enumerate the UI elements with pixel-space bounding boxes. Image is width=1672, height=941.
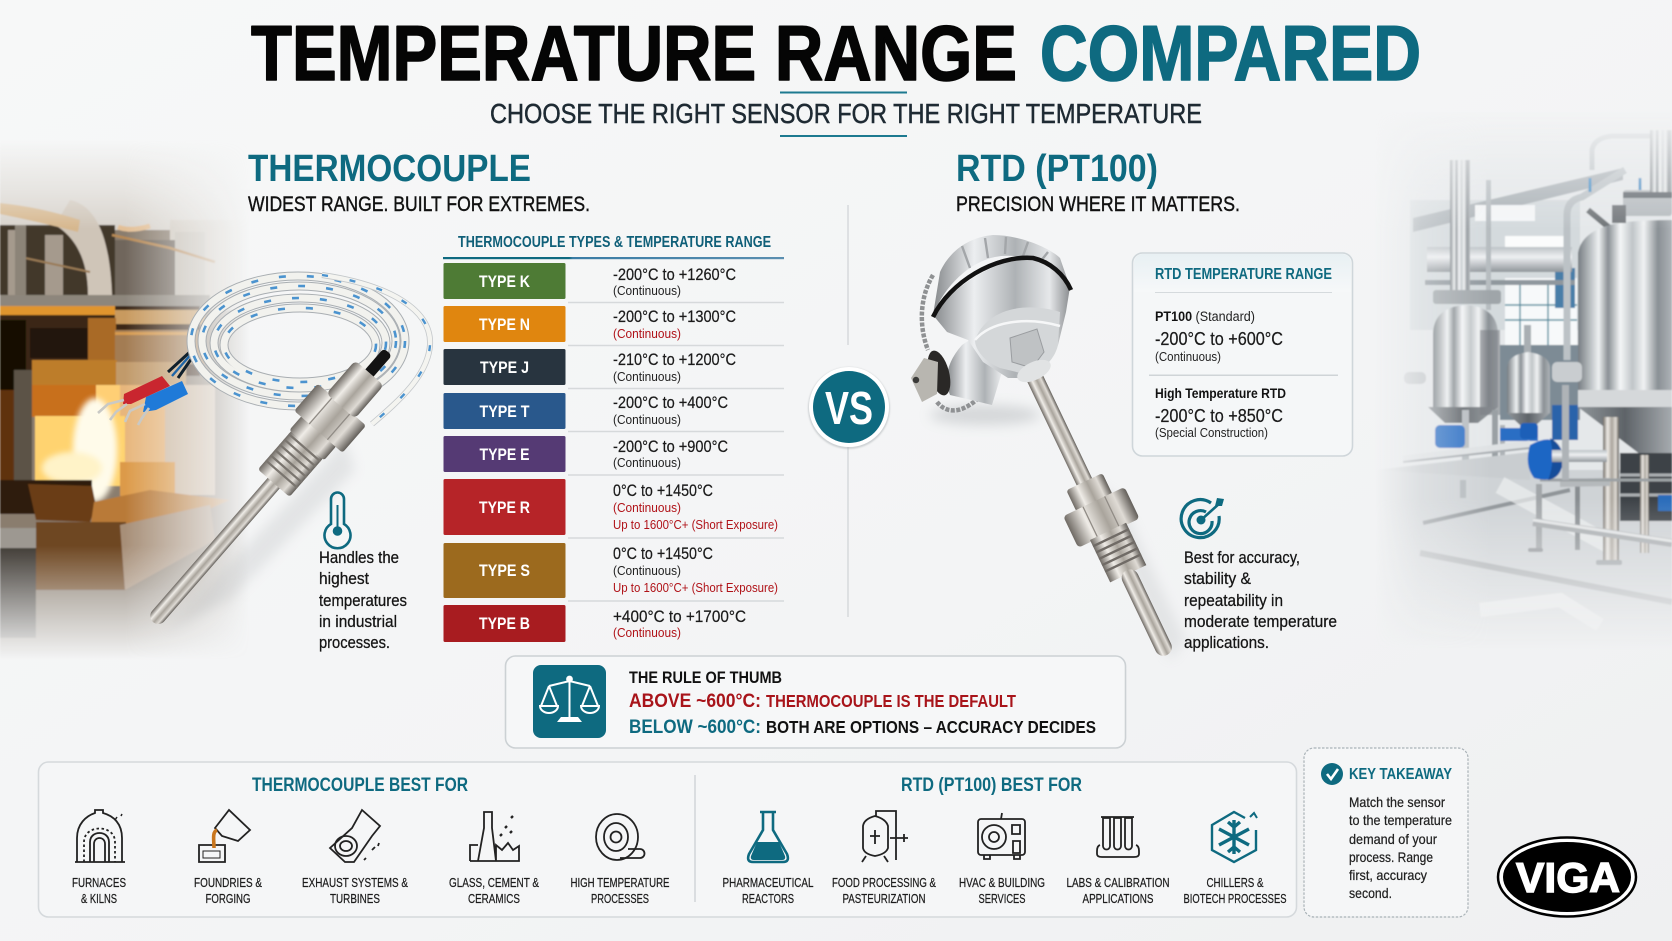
heading: thermocouple: WIDEST RANGE. BUILT FOR EXTREMES.	[248, 193, 590, 216]
panel: key takeaway: KEY TAKEAWAY	[1349, 766, 1453, 783]
callout: the rule of thumb: BELOW ~600°C:	[629, 716, 761, 738]
panel: best for: THERMOCOUPLE BEST FOR	[252, 775, 468, 796]
row: type K: TYPE K	[479, 272, 531, 291]
panel: RTD temperature range: RTD TEMPERATURE RANGE	[1155, 266, 1332, 283]
row: type B	[444, 605, 746, 642]
item: HVAC and building services: SERVICES	[978, 892, 1026, 906]
row: type B: +400°C to +1700°C	[613, 608, 746, 626]
logo: VIGA: VIGA	[1516, 854, 1620, 901]
row: type K: (Continuous)	[613, 284, 681, 298]
item: exhaust systems and turbines: EXHAUST SYSTEMS &	[302, 876, 409, 890]
panel: RTD temperature range	[1132, 253, 1352, 456]
panel: key takeaway: demand of your	[1349, 831, 1437, 847]
panel: key takeaway: Match the sensor	[1349, 794, 1445, 810]
callout: the rule of thumb: BOTH ARE OPTIONS – ACCURACY DECIDES	[766, 717, 1096, 737]
item: foundries and forging	[194, 810, 263, 906]
item: HVAC and building services: HVAC & BUILDING	[959, 876, 1045, 890]
item: food processing and pasteurization: PASTEURIZATION	[842, 892, 926, 906]
text: RTD note: applications.	[1184, 633, 1269, 652]
item: chillers and biotech processes: BIOTECH PROCESSES	[1184, 892, 1286, 906]
heading: RTD: PRECISION WHERE IT MATTERS.	[956, 193, 1240, 216]
callout: the rule of thumb: ABOVE ~600°C:	[629, 690, 761, 712]
thermocouple sensor illustration	[98, 275, 430, 643]
text: thermocouple note: Handles the	[319, 548, 399, 567]
panel: key takeaway: first, accuracy	[1349, 867, 1427, 883]
panel: RTD temperature range: -200°C to +850°C	[1155, 405, 1283, 426]
item: furnaces and kilns: FURNACES	[72, 876, 126, 890]
item: glass, cement and ceramics: CERAMICS	[468, 892, 520, 906]
item: high temperature processes: PROCESSES	[591, 892, 649, 906]
item: pharmaceutical reactors	[722, 812, 814, 906]
row: type B: TYPE B	[479, 614, 530, 633]
item: exhaust systems and turbines	[302, 810, 409, 906]
callout: the rule of thumb	[506, 656, 1126, 748]
text: thermocouple note: temperatures	[319, 591, 407, 610]
title: TEMPERATURE RANGE	[251, 9, 1017, 97]
VS badge	[808, 367, 890, 449]
item: glass, cement and ceramics: GLASS, CEMENT &	[449, 876, 540, 890]
callout: the rule of thumb: THERMOCOUPLE IS THE DEFAULT	[766, 691, 1016, 711]
heading: thermocouple: THERMOCOUPLE	[248, 148, 531, 190]
panel: best for	[38, 762, 1296, 917]
row: type J: TYPE J	[480, 358, 529, 377]
panel: RTD temperature range: PT100 (Standard)	[1155, 309, 1255, 324]
VS badge: VS	[825, 382, 873, 434]
subtitle: CHOOSE THE RIGHT SENSOR FOR THE RIGHT TEMPERATURE	[490, 98, 1202, 129]
item: foundries and forging: FORGING	[206, 892, 250, 906]
photo: furnace	[0, 158, 243, 654]
callout: the rule of thumb: THE RULE OF THUMB	[629, 668, 782, 687]
item: high temperature processes: HIGH TEMPERATURE	[570, 876, 670, 890]
icon: target	[1181, 498, 1224, 538]
item: labs and calibration applications: APPLICATIONS	[1082, 892, 1154, 906]
row: type S: 0°C to +1450°C	[613, 545, 713, 563]
heading: RTD: RTD (PT100)	[956, 148, 1158, 190]
row: type N: (Continuous)	[613, 327, 681, 341]
row: type E	[444, 436, 728, 472]
text: RTD note	[1184, 548, 1337, 652]
row: type R: (Continuous)	[613, 501, 681, 515]
row: type K	[444, 263, 736, 299]
item: foundries and forging: FOUNDRIES &	[194, 876, 263, 890]
item: labs and calibration applications	[1066, 817, 1170, 906]
row: type J: -210°C to +1200°C	[613, 351, 736, 369]
heading: RTD	[956, 148, 1240, 216]
icon: thermometer	[325, 493, 350, 548]
row: type R	[444, 479, 778, 535]
item: pharmaceutical reactors: PHARMACEUTICAL	[722, 876, 814, 890]
text: thermocouple note: highest	[319, 569, 369, 588]
icon: check badge	[1321, 763, 1343, 785]
item: pharmaceutical reactors: REACTORS	[742, 892, 794, 906]
row: type T: (Continuous)	[613, 413, 681, 427]
table: thermocouple types	[443, 234, 784, 642]
logo: VIGA	[1498, 838, 1636, 916]
row: type B: (Continuous)	[613, 626, 681, 640]
row: type N: TYPE N	[479, 315, 530, 334]
row: type T: TYPE T	[480, 402, 530, 421]
panel: key takeaway: process. Range	[1349, 849, 1433, 865]
item: food processing and pasteurization: FOOD PROCESSING &	[832, 876, 937, 890]
row: type J	[444, 349, 736, 385]
row: type R: TYPE R	[479, 498, 530, 517]
panel: RTD temperature range: High Temperature RTD	[1155, 386, 1286, 401]
row: type R: Up to 1600°C+ (Short Exposure)	[613, 518, 778, 532]
table: thermocouple types: THERMOCOUPLE TYPES & TEMPERATURE RANGE	[458, 234, 771, 251]
icon: balance scale	[533, 665, 606, 738]
row: type S: Up to 1600°C+ (Short Exposure)	[613, 581, 778, 595]
row: type K: -200°C to +1260°C	[613, 266, 736, 284]
row: type R: 0°C to +1450°C	[613, 482, 713, 500]
row: type N: -200°C to +1300°C	[613, 308, 736, 326]
item: chillers and biotech processes	[1184, 812, 1286, 906]
panel: key takeaway: second.	[1349, 885, 1392, 901]
item: glass, cement and ceramics	[449, 812, 540, 906]
row: type S	[444, 543, 778, 598]
item: furnaces and kilns: & KILNS	[81, 892, 117, 906]
panel: RTD temperature range: (Special Construction)	[1155, 426, 1268, 440]
text: thermocouple note: in industrial	[319, 612, 397, 631]
row: type T: -200°C to +400°C	[613, 394, 728, 412]
item: high temperature processes	[570, 814, 670, 906]
item: furnaces and kilns	[72, 810, 126, 906]
item: HVAC and building services	[959, 813, 1045, 906]
text: thermocouple note: processes.	[319, 633, 390, 652]
row: type J: (Continuous)	[613, 370, 681, 384]
row: type S: (Continuous)	[613, 564, 681, 578]
panel: best for: RTD (PT100) BEST FOR	[901, 775, 1082, 796]
item: labs and calibration applications: LABS & CALIBRATION	[1066, 876, 1170, 890]
panel: RTD temperature range: (Continuous)	[1155, 350, 1221, 364]
RTD sensor illustration	[911, 235, 1198, 670]
text: RTD note: stability &	[1184, 569, 1252, 588]
row: type S: TYPE S	[479, 561, 530, 580]
row: type E: TYPE E	[480, 445, 530, 464]
heading: thermocouple	[248, 148, 590, 216]
panel: key takeaway	[1304, 748, 1468, 917]
text: RTD note: repeatability in	[1184, 591, 1283, 610]
text: RTD note: Best for accuracy,	[1184, 548, 1300, 567]
text: thermocouple note	[319, 548, 407, 652]
title: COMPARED	[1040, 9, 1421, 97]
row: type E: (Continuous)	[613, 456, 681, 470]
text: RTD note: moderate temperature	[1184, 612, 1337, 631]
row: type N	[444, 306, 736, 342]
panel: RTD temperature range: -200°C to +600°C	[1155, 328, 1283, 349]
photo: stainless steel process plant	[1390, 130, 1672, 617]
row: type E: -200°C to +900°C	[613, 438, 728, 456]
divider	[847, 205, 849, 617]
item: food processing and pasteurization	[832, 811, 937, 906]
item: exhaust systems and turbines: TURBINES	[330, 892, 380, 906]
item: chillers and biotech processes: CHILLERS &	[1206, 876, 1264, 890]
row: type T	[444, 393, 728, 429]
panel: key takeaway: to the temperature	[1349, 812, 1452, 828]
